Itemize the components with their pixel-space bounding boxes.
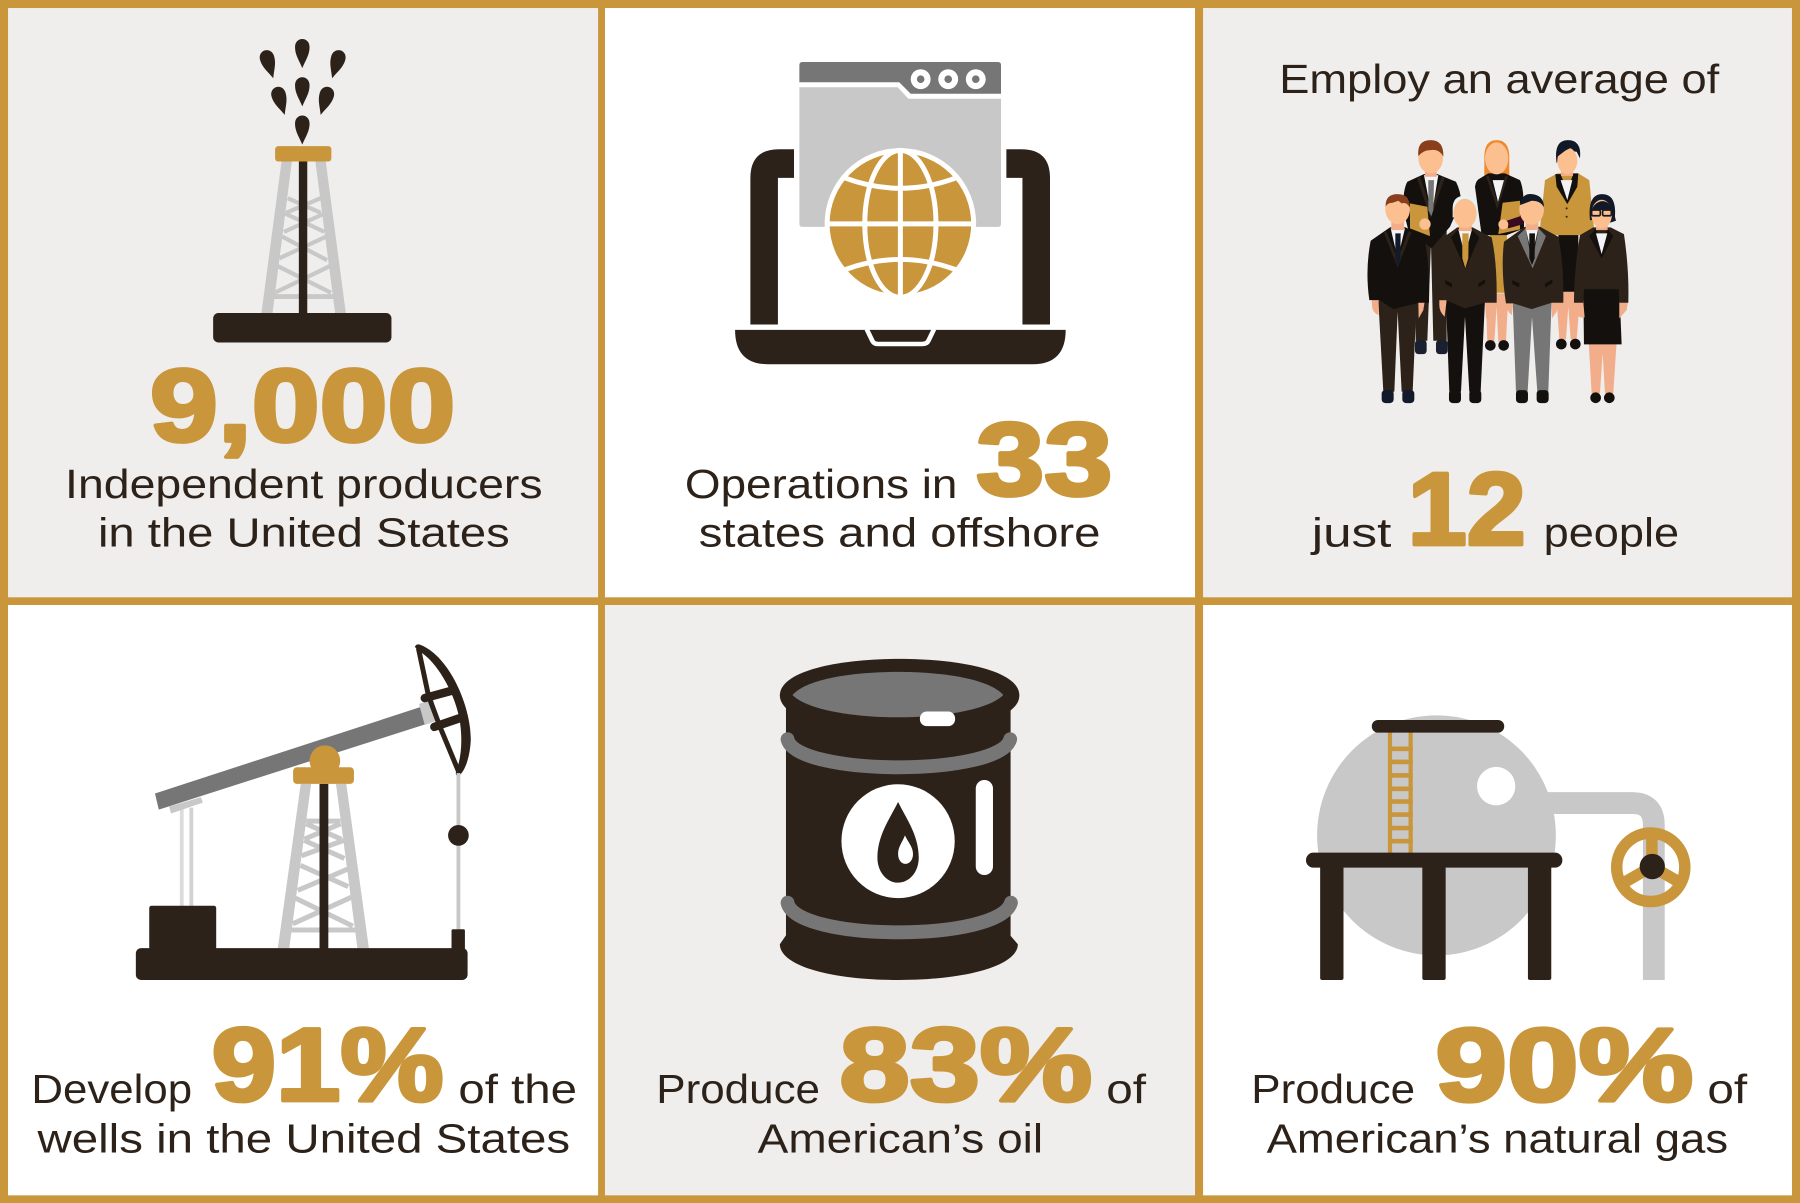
figure: back man with folder: [1403, 140, 1461, 354]
panel: employ an average of 12 people: [1203, 8, 1792, 597]
caption: american's oil: American’s oil: [758, 1115, 1043, 1161]
caption: just: just: [1310, 509, 1391, 555]
caption: wells in the united states: wells in the United States: [36, 1115, 570, 1161]
icon: laptop with browser window and globe: [735, 62, 1066, 364]
caption: develop: Develop: [31, 1066, 192, 1112]
panel: operations in 33 states: [605, 8, 1195, 597]
caption: produce: Produce: [1251, 1066, 1415, 1112]
icon: gas storage tank with valve: [1306, 715, 1685, 980]
caption: independent producers: in the United States: [98, 509, 510, 555]
big number: 91%: 91%: [212, 1007, 443, 1123]
panel: develop 91% of the wells: [8, 605, 598, 1195]
panel: produce 90% of american's natural gas: [1203, 605, 1792, 1195]
icon: pumpjack: [136, 644, 471, 980]
figure: front woman with glasses: [1574, 194, 1628, 403]
figure: back woman with orange hair: [1475, 140, 1524, 351]
caption: of: of: [1106, 1066, 1147, 1112]
caption: employ an average of: Employ an average of: [1279, 56, 1720, 102]
icon: oil barrel: [780, 659, 1019, 980]
caption: produce: Produce: [656, 1066, 820, 1112]
big number: 9,000: 9,000: [150, 347, 455, 463]
figure: back woman in gold jacket: [1540, 140, 1594, 349]
caption: of: of: [1707, 1066, 1748, 1112]
figure: front man in black jacket: [1367, 194, 1429, 403]
caption: operations in: Operations in: [685, 461, 957, 507]
caption: people: people: [1544, 509, 1679, 555]
caption: independent producers: [65, 461, 543, 555]
caption: of the: of the: [458, 1066, 577, 1112]
icon: group of business people: [1367, 140, 1628, 403]
caption: states and offshore: states and offshore: [699, 509, 1101, 555]
caption: american's natural gas: American’s natural gas: [1267, 1115, 1728, 1161]
caption: independent producers: Independent producers: [65, 461, 543, 507]
big number: 12: 12: [1408, 451, 1526, 567]
panel: independent producers: [8, 8, 598, 597]
big number: 90%: 90%: [1435, 1007, 1693, 1123]
big number: 33: 33: [976, 401, 1112, 517]
panel: produce 83% of american's oil: [605, 605, 1195, 1195]
figure: front man with white hair: [1435, 196, 1497, 403]
icon: oil derrick with gushing drops: [213, 39, 391, 342]
big number: 83%: 83%: [840, 1007, 1092, 1123]
figure: front man in grey trousers: [1503, 194, 1563, 403]
